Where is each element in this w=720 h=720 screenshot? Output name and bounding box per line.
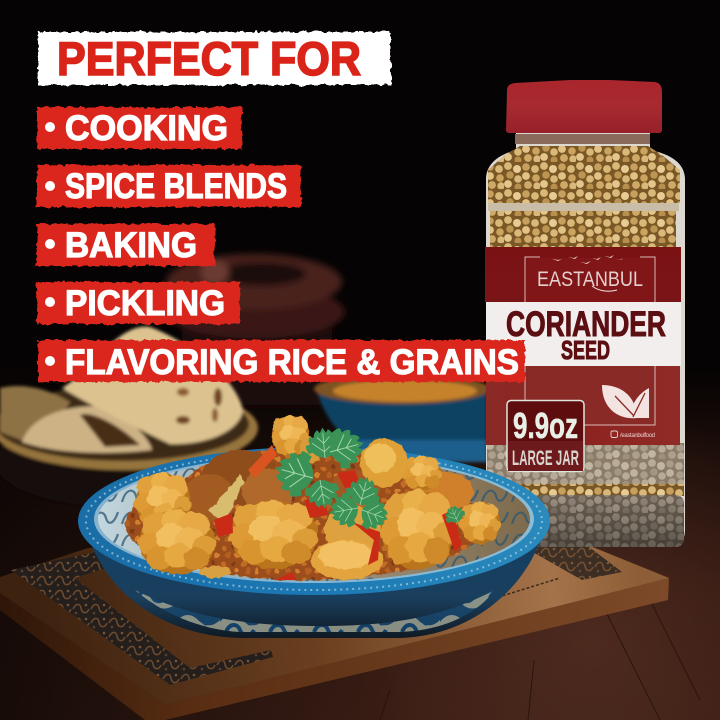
label	[485, 247, 681, 445]
curry base	[125, 448, 485, 580]
product name: SEED	[561, 335, 610, 365]
brand logo	[537, 255, 643, 291]
bowl rim	[78, 447, 550, 595]
product name	[506, 305, 666, 365]
size badge	[507, 400, 584, 472]
instagram handle	[611, 431, 655, 439]
red peppers	[214, 445, 462, 580]
cutting board	[0, 528, 669, 720]
bowl body	[88, 535, 542, 638]
item: pickling: PICKLING	[65, 284, 225, 323]
item: cooking: COOKING	[65, 109, 228, 148]
item: baking: BAKING	[65, 226, 197, 265]
instagram handle: /eastanbulfood	[620, 433, 655, 439]
heading: perfect for: PERFECT FOR	[57, 32, 361, 85]
size badge: 9.9oz	[513, 405, 578, 446]
icon: leaves	[602, 385, 649, 418]
jar body	[486, 132, 685, 547]
item: spice blends: SPICE BLENDS	[65, 167, 287, 206]
middle seeds	[490, 211, 676, 249]
jar cap	[506, 80, 662, 133]
brand logo: EASTANBUL	[537, 268, 643, 291]
brass plate with flatbread	[0, 327, 258, 507]
lower seeds	[487, 443, 684, 485]
jar of coriander seed	[485, 80, 685, 547]
list of uses	[37, 107, 525, 382]
product name: CORIANDER	[506, 305, 666, 344]
item: flavoring rice and grains: FLAVORING RICE & GRAINS	[65, 343, 519, 382]
blue bowl in background	[314, 374, 490, 462]
blurred clay pot	[165, 254, 345, 405]
cauliflower and potato pieces	[134, 415, 500, 580]
size badge: LARGE JAR	[512, 447, 579, 470]
upper seeds	[488, 146, 680, 203]
cilantro garnish	[269, 423, 467, 535]
main bowl of cauliflower curry	[78, 415, 550, 638]
